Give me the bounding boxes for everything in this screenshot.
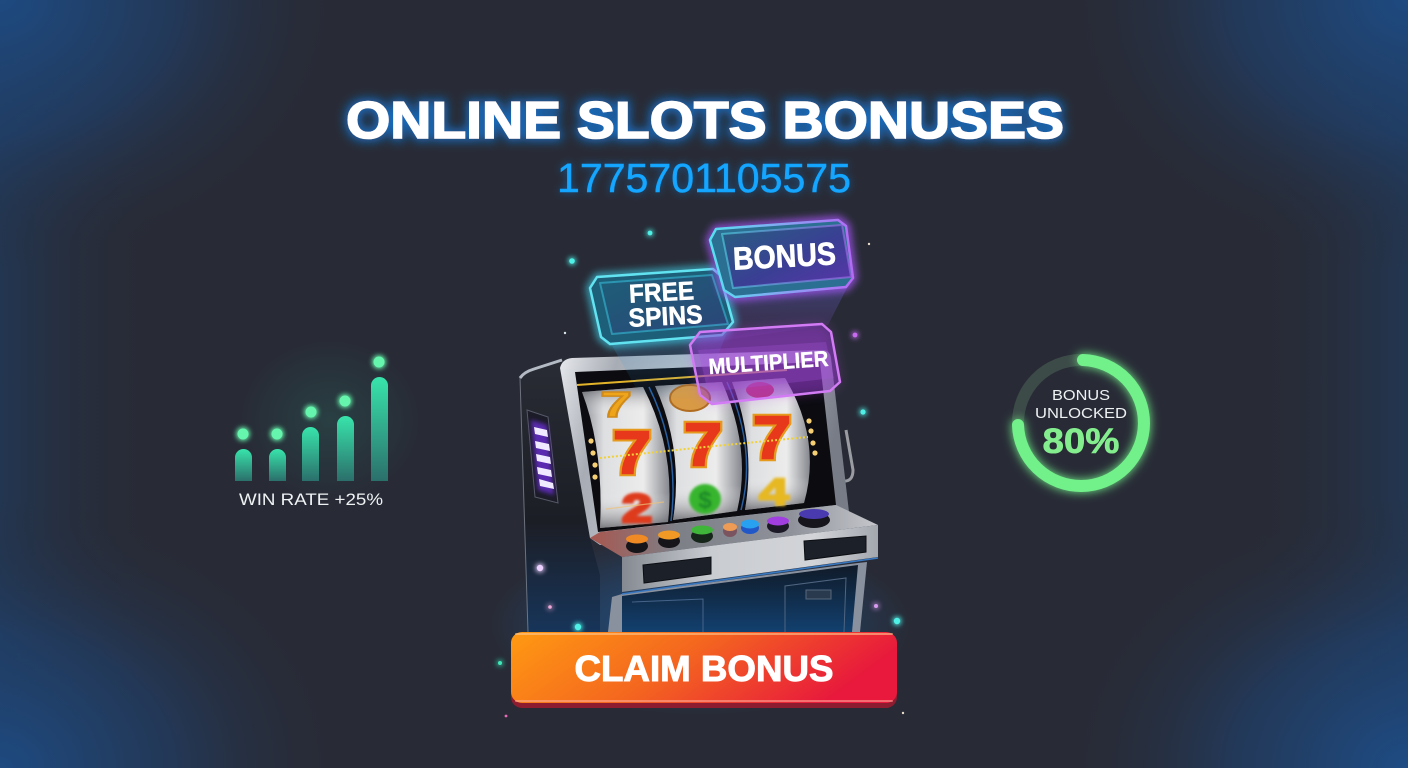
reel 3 bottom symbol: 4 bbox=[759, 472, 789, 514]
gold trim line bbox=[577, 370, 787, 385]
reel 2 main seven: 7 bbox=[684, 411, 722, 478]
lower cabinet bbox=[608, 558, 878, 632]
reel 1 main seven: 7 bbox=[613, 419, 651, 486]
button label: CLAIM BONUS bbox=[574, 648, 834, 689]
coin slot left bbox=[643, 557, 711, 583]
reel 1 bottom blurred symbol: 2 bbox=[622, 487, 652, 531]
ring percent: 80% bbox=[1042, 422, 1120, 461]
reel 1 main seven: 7 bbox=[613, 419, 651, 486]
reel 1 bottom blurred symbol bbox=[606, 487, 664, 531]
cabinet side bbox=[520, 359, 600, 632]
progress ring: bonus unlocked bbox=[1018, 360, 1144, 486]
badge: free spins: SPINS bbox=[628, 299, 703, 333]
subtitle number: 1775701105575 bbox=[557, 155, 851, 201]
chrome frame bbox=[560, 350, 849, 545]
bar 2 bbox=[269, 428, 286, 481]
reel 3 main seven: 7 bbox=[753, 404, 791, 471]
lever bbox=[843, 430, 853, 481]
console front bbox=[622, 525, 878, 592]
free spins text: FREE bbox=[628, 275, 695, 309]
multiplier text: MULTIPLIER bbox=[708, 346, 829, 379]
badge: bonus bbox=[710, 220, 853, 297]
reel gap highlights bbox=[649, 382, 747, 521]
light strip bbox=[527, 410, 558, 503]
reel 1 top seven: 7 bbox=[600, 384, 632, 425]
ring text line 2: UNLOCKED bbox=[1035, 405, 1127, 422]
chart: win rate bars bbox=[235, 340, 420, 509]
reel 3 top symbol bbox=[746, 382, 774, 398]
coin slot right bbox=[804, 536, 866, 560]
bar 3 bbox=[302, 406, 319, 481]
bar 1 bbox=[235, 428, 252, 481]
reel 2 coin bbox=[670, 385, 710, 411]
projection beams bbox=[610, 278, 852, 400]
chart label: WIN RATE +25% bbox=[239, 490, 383, 509]
ring progress arc bbox=[1018, 360, 1144, 486]
screen bbox=[575, 362, 836, 532]
floor glow bbox=[490, 535, 910, 715]
reel 3 bbox=[732, 378, 810, 514]
bar 4 bbox=[337, 396, 354, 481]
reel 1 bbox=[582, 384, 670, 531]
reel lights bbox=[588, 418, 818, 480]
reel 2 main seven: 7 bbox=[684, 411, 722, 478]
bonus text: BONUS bbox=[732, 235, 837, 277]
title: ONLINE SLOTS BONUSES bbox=[346, 92, 1064, 150]
bar 5 bbox=[371, 356, 388, 481]
reel 3 main seven: 7 bbox=[753, 404, 791, 471]
badge: multiplier bbox=[690, 324, 840, 404]
badge: free spins bbox=[590, 269, 733, 344]
ring text line 1: BONUS bbox=[1052, 387, 1110, 404]
slot machine bbox=[520, 350, 878, 632]
console deck bbox=[590, 505, 878, 557]
payline bbox=[600, 437, 808, 458]
reel 2 bbox=[655, 382, 742, 520]
sparkles bbox=[498, 231, 904, 717]
reel 2 green symbol: $ bbox=[698, 487, 712, 514]
claim bonus button bbox=[511, 632, 897, 708]
console buttons bbox=[626, 509, 830, 553]
